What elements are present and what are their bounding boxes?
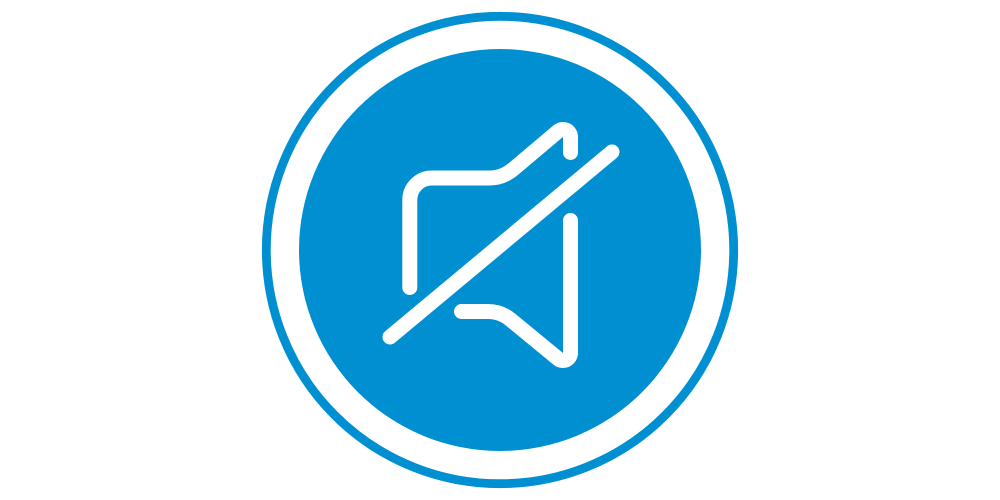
speaker upper outline bbox=[410, 129, 571, 288]
speaker lower outline bbox=[462, 220, 571, 361]
inner filled disc bbox=[299, 49, 701, 451]
mute slash bbox=[390, 152, 612, 337]
outer ring bbox=[266, 16, 734, 484]
icon: muted speaker bbox=[390, 129, 612, 361]
